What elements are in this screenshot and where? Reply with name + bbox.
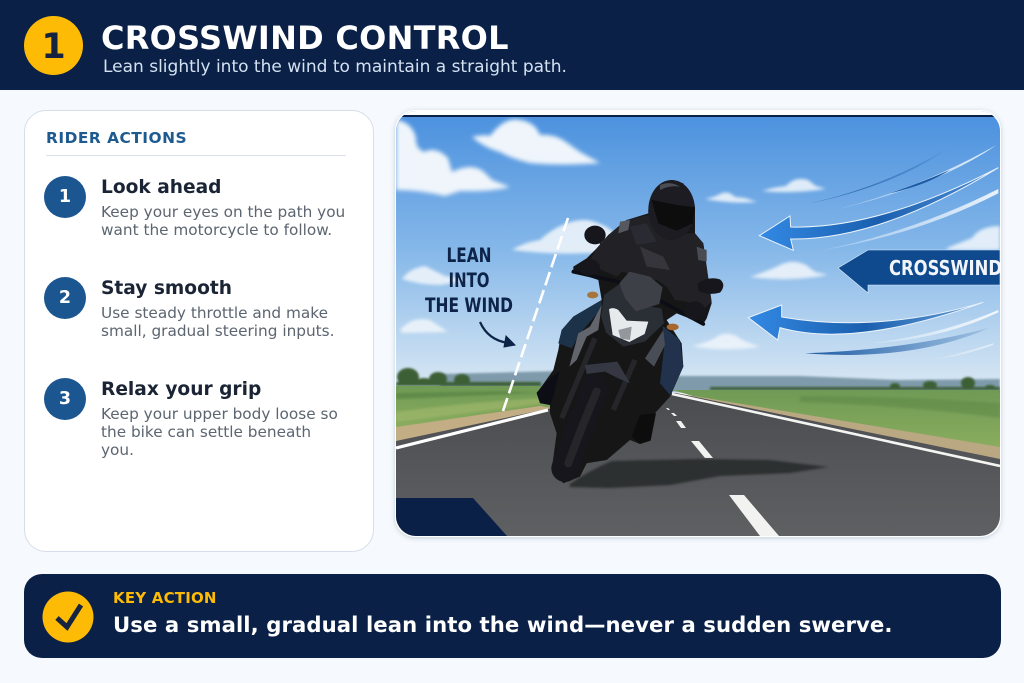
tree lines (396, 368, 1000, 390)
action 3 text: Keep your upper body loose so (101, 405, 338, 423)
sign text: CROSSWIND (889, 256, 1002, 280)
rider legs (558, 300, 602, 348)
photo top rule (396, 115, 1000, 117)
sky (396, 111, 1000, 391)
gloves (579, 259, 600, 275)
photo scene (396, 111, 1002, 536)
helmet (648, 180, 695, 240)
action 3 text: you. (101, 441, 134, 459)
action 1 title: Look ahead (101, 177, 222, 198)
road verge (396, 406, 552, 442)
mirrors (584, 226, 606, 244)
lean angle dashed line (503, 218, 568, 411)
illustration: rider leaning into crosswind (392, 108, 1004, 540)
action 1 text (101, 203, 345, 239)
upper wind arrow (759, 168, 998, 250)
step number badge: 1 (41, 27, 66, 67)
combined silhouette (537, 180, 712, 483)
centre dashes (666, 408, 779, 536)
upper streaks (808, 150, 945, 204)
header band (0, 0, 1024, 90)
action 2 number: 2 (59, 288, 71, 308)
front tyre (551, 462, 572, 482)
action 1 text: Keep your eyes on the path you (101, 203, 345, 221)
heading rule (46, 155, 346, 156)
action 3 number: 3 (59, 389, 71, 409)
panel heading: RIDER ACTIONS (46, 129, 187, 147)
clouds (396, 119, 1000, 349)
label line 1: LEAN (446, 244, 492, 267)
action 3 title: Relax your grip (101, 379, 261, 400)
fairing (601, 284, 664, 347)
rider boots (537, 372, 559, 405)
wind arrows (748, 145, 998, 360)
key action bar (24, 574, 1001, 658)
headlight (609, 308, 648, 342)
motorcycle and rider (537, 180, 723, 483)
action 2 text (101, 304, 335, 340)
action 3 text (101, 405, 338, 459)
action 2 (44, 277, 335, 340)
action 2 text: Use steady throttle and make (101, 304, 328, 322)
rider jacket details (618, 220, 630, 233)
action 1 (44, 176, 345, 239)
step number badge (24, 16, 83, 75)
sign arrow (838, 250, 1000, 293)
panel: rider actions (24, 110, 374, 552)
rider jacket (588, 215, 712, 312)
icon: check mark badge (42, 592, 94, 642)
turn signals (587, 292, 598, 298)
lower streaks (870, 310, 998, 343)
key action label: KEY ACTION (113, 589, 217, 607)
navy corner tab (396, 498, 507, 536)
distant hills (440, 371, 1000, 392)
crosswind sign (838, 250, 1002, 293)
action 2 title: Stay smooth (101, 278, 232, 299)
label line 3: THE WIND (425, 294, 513, 317)
title: CROSSWIND CONTROL (101, 19, 509, 57)
mirror stems (600, 242, 602, 244)
action 1 number: 1 (59, 187, 71, 207)
key action message: Use a small, gradual lean into the wind—never a sudden swerve. (113, 612, 892, 637)
road surface (396, 393, 1000, 536)
middle streak (822, 189, 998, 250)
forks and mudguard (562, 338, 635, 418)
road edge lines (396, 410, 548, 448)
lean into the wind label (425, 248, 512, 312)
action 3 (44, 378, 338, 459)
subtitle: Lean slightly into the wind to maintain a straight path. (103, 57, 567, 77)
label line 2: INTO (448, 269, 490, 292)
action 1 text: want the motorcycle to follow. (101, 221, 332, 239)
curved arrow to lean line (480, 322, 515, 347)
fields (396, 386, 550, 427)
action 3 number (44, 378, 86, 420)
photo frame (395, 110, 1001, 537)
windscreen (619, 272, 663, 311)
action 1 number (44, 176, 86, 218)
action 2 number (44, 277, 86, 319)
action 2 text: small, gradual steering inputs. (101, 322, 335, 340)
action 3 text: the bike can settle beneath (101, 423, 311, 441)
handlebars (573, 272, 703, 324)
bike side panels (569, 305, 602, 367)
motorcycle shadow (570, 459, 828, 488)
lower wind arrow (748, 302, 983, 340)
